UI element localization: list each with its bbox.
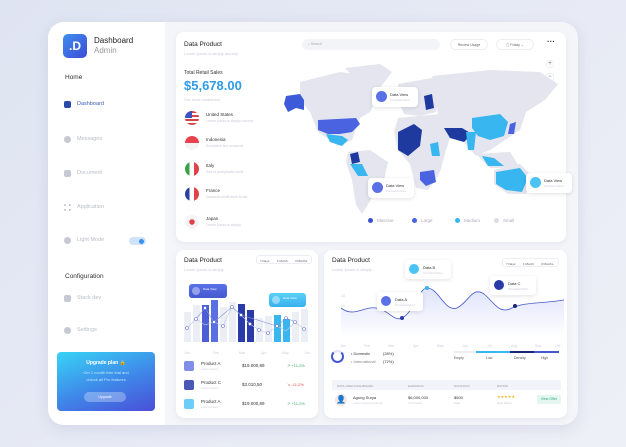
- density legend: Empty: [454, 356, 464, 360]
- logo: [63, 34, 87, 58]
- country list: [185, 111, 254, 229]
- light mode toggle: Light Mode: [77, 237, 104, 243]
- line chart: 10: [341, 304, 345, 308]
- callout: data A: Data A: [395, 297, 407, 302]
- donut stats: (28%): [383, 351, 394, 356]
- bar callout B: [269, 293, 306, 307]
- callout: data view 2: Put Description: [386, 189, 406, 193]
- callout: data B: [405, 260, 451, 279]
- panel: line chart: [324, 250, 567, 418]
- country: France: France: [206, 188, 220, 193]
- callout: data view 1: [372, 87, 418, 107]
- map legend: Large: [421, 218, 433, 223]
- callout: data B: Data B: [423, 265, 435, 270]
- panel: map: [176, 32, 566, 242]
- nav: messages: Messages: [77, 136, 102, 142]
- user table: Best Rated: [497, 401, 512, 405]
- line chart: [340, 286, 564, 348]
- panel: bar chart: Data Product: [184, 257, 222, 264]
- range buttons: 7 Days: [260, 258, 269, 262]
- panel: map: Our most customers: [184, 97, 220, 102]
- callout: data view 3: [526, 173, 572, 193]
- range buttons: 1 Month: [277, 258, 288, 262]
- line chart: Sep: [535, 344, 541, 348]
- map legend: [368, 218, 514, 223]
- line chart: Jun: [462, 344, 468, 348]
- nav: application: [64, 204, 104, 211]
- bar callout B: Data View: [283, 296, 297, 300]
- donut stats: [331, 350, 394, 364]
- bar chart: [184, 300, 310, 355]
- line chart: Aug: [511, 344, 517, 348]
- user table: $6,000,000: [408, 395, 428, 400]
- bar chart: May: [282, 351, 289, 355]
- product A 2: Lorem Ipsum: [201, 405, 219, 409]
- country: Indonesia: Indonesia: [206, 137, 226, 142]
- nav: dashboard: Dashboard: [77, 101, 104, 107]
- range buttons: [256, 255, 312, 264]
- callout: data A: [377, 292, 423, 311]
- product C: Product C: [201, 380, 221, 385]
- friday button: ▢ Friday ⌄: [506, 43, 524, 47]
- callout: data view 2: [368, 178, 414, 198]
- product C: Lorem Ipsum: [201, 386, 219, 390]
- upgrade card: Get 1 month free trial and: [83, 370, 129, 375]
- map legend: Massive: [377, 218, 394, 223]
- country: Italy: Italy: [206, 163, 214, 168]
- user table: DATA USER DASHBOARD: [337, 384, 373, 388]
- product A: $19.000,89: [242, 363, 265, 368]
- range buttons: 3 Months: [295, 258, 307, 262]
- nav: messages: [64, 136, 102, 143]
- bar callout A: [189, 284, 227, 298]
- country: US: [185, 111, 254, 125]
- search: ⌕ Search: [308, 42, 322, 46]
- bar callout A: Data View: [203, 287, 217, 291]
- callout: data view 3: Data View: [544, 178, 562, 183]
- product A: Product A: [201, 361, 221, 366]
- product A 2: $19.000,89: [242, 401, 265, 406]
- user table: ★★★★★: [497, 394, 515, 399]
- line chart: Mar: [388, 344, 395, 348]
- line chart: May: [437, 344, 444, 348]
- country: US: Lorem Ipsum is simply dummy: [206, 119, 253, 123]
- user table: Agung Surya: [353, 395, 376, 400]
- search: [302, 39, 440, 50]
- country: Japan: [185, 215, 241, 229]
- line chart: 0: [343, 334, 345, 338]
- product A: Lorem Ipsum: [201, 367, 219, 371]
- line chart: Jul: [487, 344, 492, 348]
- panel: bar chart: Lorem Ipsum is simply: [184, 267, 224, 272]
- range buttons: 7 Days: [506, 262, 515, 266]
- product C: [184, 380, 304, 390]
- product A 2: Product A: [201, 399, 221, 404]
- map legend: Small: [503, 218, 514, 223]
- review usage button: [450, 39, 488, 50]
- zoom controls: +: [548, 61, 552, 67]
- map title: Data Product: [184, 41, 222, 48]
- line chart: 10: [341, 314, 345, 318]
- nav: application: Application: [77, 204, 104, 210]
- callout: data C: Data C: [508, 281, 520, 286]
- zoom controls: [546, 60, 554, 68]
- nav: document: [64, 170, 102, 177]
- brand: Dashboard: [94, 36, 133, 45]
- density legend: High: [541, 356, 548, 360]
- panel: map: $5,678.00: [184, 78, 242, 93]
- callout: data A: Put Description: [395, 303, 415, 307]
- product A 2: [184, 399, 305, 409]
- line chart: Feb: [364, 344, 370, 348]
- country: France: [185, 187, 248, 201]
- density legend: [454, 351, 559, 360]
- callout: data B: Put Description: [423, 271, 443, 275]
- total sales: Total Retail Sales: [184, 70, 223, 76]
- home heading: Home: [65, 74, 82, 81]
- callout: data view 3: Put Description: [544, 184, 564, 188]
- country: Indonesia: [185, 136, 243, 150]
- panel: map: −: [548, 74, 552, 80]
- upgrade card: unlock all Pro features: [86, 377, 126, 382]
- user table: DONATION: [454, 384, 470, 388]
- nav: stack dev: Stack dev: [77, 295, 101, 301]
- density legend: Low: [486, 356, 492, 360]
- product A: [184, 361, 305, 371]
- product A: ↗ +11,2%: [287, 363, 305, 368]
- panel: line chart: Lorem Ipsum is simply: [332, 267, 372, 272]
- line chart: 15: [341, 294, 345, 298]
- nav: stack dev: [64, 295, 101, 302]
- more menu: ···: [547, 37, 555, 46]
- bar chart: Jan: [184, 351, 190, 355]
- light mode toggle: [64, 237, 146, 245]
- bar chart: Apr: [261, 351, 267, 355]
- logo: .D: [69, 39, 81, 53]
- product A 2: ↗ +11,2%: [287, 401, 305, 406]
- user table: EARNINGS: [408, 384, 424, 388]
- callout: data C: Put Description: [508, 287, 528, 291]
- user table: In Process: [408, 401, 422, 405]
- callout: data view 2: Data View: [386, 183, 404, 188]
- upgrade card: [57, 352, 155, 411]
- user table: $500: [454, 395, 463, 400]
- panel: line chart: Data Product: [332, 257, 370, 264]
- upgrade card: Upgrade plan 🔒: [86, 360, 126, 366]
- callout: data view 1: Data View: [390, 92, 408, 97]
- donut stats: • Domestic: [351, 351, 370, 356]
- bar chart: Mar: [239, 351, 246, 355]
- user table: [332, 380, 561, 406]
- bar chart: Feb: [213, 351, 219, 355]
- review usage button: Review Usage: [458, 43, 480, 47]
- range buttons: [502, 258, 559, 267]
- user table: Lorem Ipsum is simply: [353, 401, 383, 405]
- user table: 👤: [336, 395, 346, 404]
- line chart: Oct: [555, 344, 560, 348]
- country: US: United States: [206, 112, 233, 117]
- country: Indonesia: Excepteur sint occaecat: [206, 144, 243, 148]
- user table: View Offer: [541, 397, 557, 401]
- friday button: [496, 39, 534, 50]
- upgrade card: Upgrade: [98, 395, 112, 399]
- donut stats: (72%): [383, 359, 394, 364]
- nav: document: Document: [77, 170, 102, 176]
- callout: data C: [490, 276, 536, 295]
- panel: bar chart: [176, 250, 318, 418]
- density legend: Density: [514, 356, 526, 360]
- sidebar: Admin: [94, 46, 117, 55]
- line chart: 5: [343, 324, 345, 328]
- donut stats: • International: [351, 359, 376, 364]
- callout: data view 1: Put Description: [390, 98, 410, 102]
- product rows: [184, 361, 305, 409]
- country: Japan: Lorem Ipsum is simply: [206, 223, 241, 227]
- range buttons: 3 Months: [541, 262, 553, 266]
- user table: Paid: [454, 401, 460, 405]
- nav: settings: Settings: [77, 327, 97, 333]
- nav: dashboard: [64, 101, 104, 108]
- country: France: Deserunt mollit anim id est: [206, 195, 247, 199]
- bar chart: Jun: [304, 351, 310, 355]
- panel: map: Lorem Ipsum is simply dummy: [184, 51, 238, 56]
- nav: settings: [64, 327, 97, 334]
- product C: $3.010,50: [242, 382, 262, 387]
- outer frame: [48, 22, 578, 425]
- map legend: Medium: [464, 218, 480, 223]
- world map: [284, 64, 558, 214]
- sidebar: [48, 22, 165, 425]
- range buttons: 1 Month: [523, 262, 534, 266]
- user table: RATING: [497, 384, 508, 388]
- country: Italy: Sed ut perspiciatis unde: [206, 170, 243, 174]
- line chart: Jan: [340, 344, 346, 348]
- product C: ↘ -11,2%: [287, 382, 304, 387]
- country: Italy: [185, 162, 244, 176]
- country: Japan: Japan: [206, 216, 218, 221]
- configuration heading: Configuration: [65, 273, 104, 280]
- line chart: Apr: [413, 344, 419, 348]
